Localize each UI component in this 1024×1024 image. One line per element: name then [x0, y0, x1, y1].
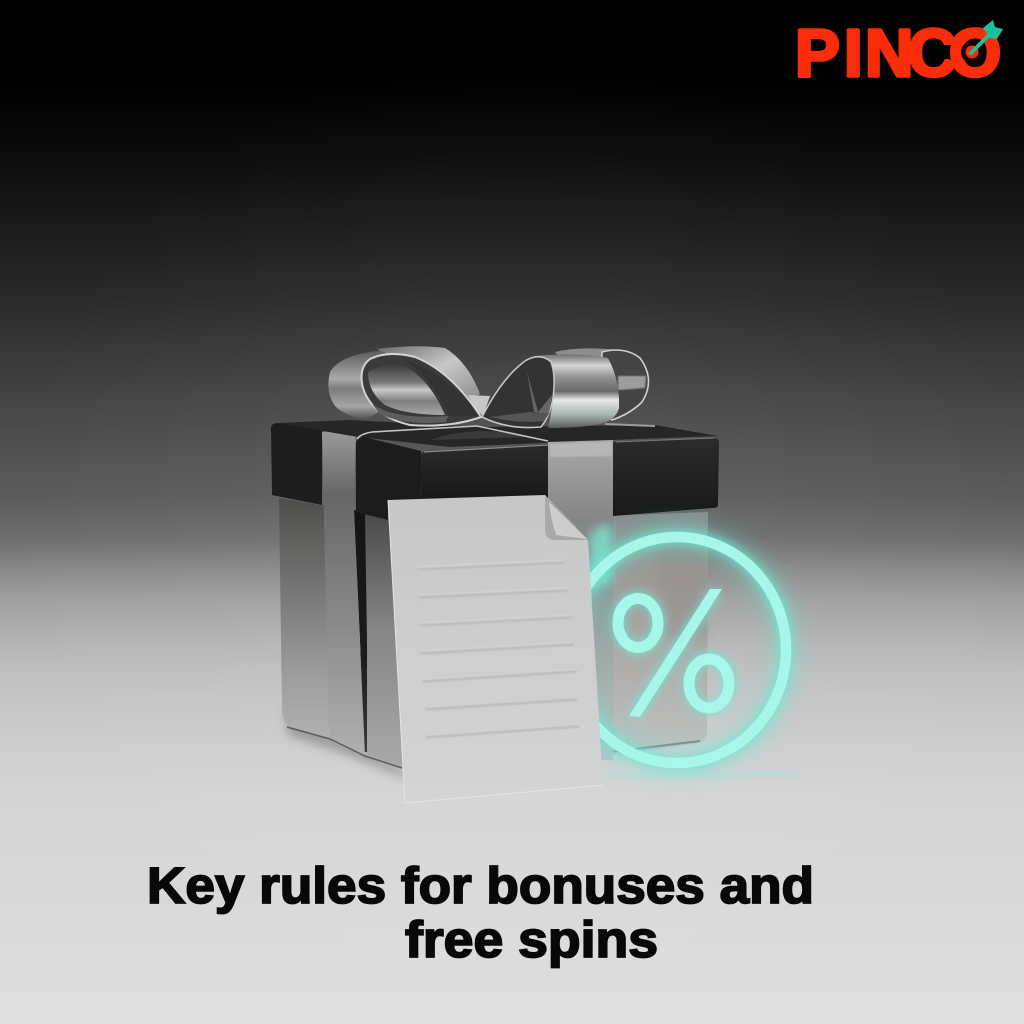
target ring: [961, 41, 983, 63]
silver bow: [328, 346, 649, 428]
box center face: [360, 512, 405, 768]
left base line: [287, 727, 402, 768]
neon percent badge: [568, 525, 800, 776]
left loop dark fold: [405, 360, 479, 416]
target center: [966, 46, 978, 58]
arrow fletching: [983, 20, 1003, 39]
lid top highlight: [616, 438, 714, 442]
box left face: [279, 498, 330, 740]
floor glow: [606, 772, 800, 776]
right loop inner cone: [527, 372, 552, 414]
logo: PINCO: [795, 16, 1003, 91]
left loop inner reflection: [368, 365, 445, 415]
badge glow: [568, 537, 786, 763]
box right face: [606, 512, 708, 756]
right back band: [555, 348, 622, 370]
dark gap beside strap: [354, 510, 367, 752]
text lines: [417, 560, 579, 736]
right back loop: [600, 350, 649, 420]
left front loop: [362, 354, 481, 426]
percent bottom circle: [689, 659, 729, 708]
lid highlight: [424, 445, 548, 452]
document sheet: [388, 495, 603, 803]
lid top shine: [430, 431, 530, 440]
left ribbon strap: [322, 428, 365, 755]
lid front left: [356, 437, 422, 520]
logo wordmark: PINCO: [795, 16, 1001, 91]
arrow shaft: [971, 32, 992, 53]
lid front right: [613, 438, 719, 516]
wide glow: [568, 537, 786, 763]
sheet body: [388, 495, 603, 803]
box base shadow line: [610, 741, 700, 752]
right metal band: [535, 354, 619, 428]
strap top shine: [550, 442, 612, 457]
gift box: [271, 420, 719, 768]
page fold shadow: [545, 496, 588, 540]
percent top circle: [618, 598, 658, 648]
percent slash: [629, 589, 722, 717]
left outer band: [328, 351, 400, 420]
left back band: [377, 346, 480, 400]
teal haze on strap: [590, 525, 612, 590]
right ribbon strap: [548, 440, 613, 760]
title line 1: Key rules for bonuses and: [147, 857, 814, 914]
top right back ribbon edge: [605, 424, 655, 426]
right back loop shine: [618, 376, 646, 390]
lid left side: [271, 423, 322, 505]
title line 2: free spins: [405, 911, 658, 968]
knot back highlight: [468, 395, 490, 416]
badge ring: [568, 537, 786, 763]
lid top: [276, 420, 718, 447]
floor contact shadow: [285, 708, 410, 780]
strap top edge: [357, 426, 548, 441]
title: [147, 857, 814, 968]
lid front center: [421, 444, 549, 500]
right front loop: [482, 357, 554, 428]
right loop lower fold: [490, 412, 549, 422]
C counter opening: [934, 45, 948, 59]
left loop lower fold: [372, 404, 448, 423]
page fold light: [549, 502, 587, 539]
right box darker reflection: [655, 535, 707, 640]
sheet edges: [388, 500, 603, 803]
